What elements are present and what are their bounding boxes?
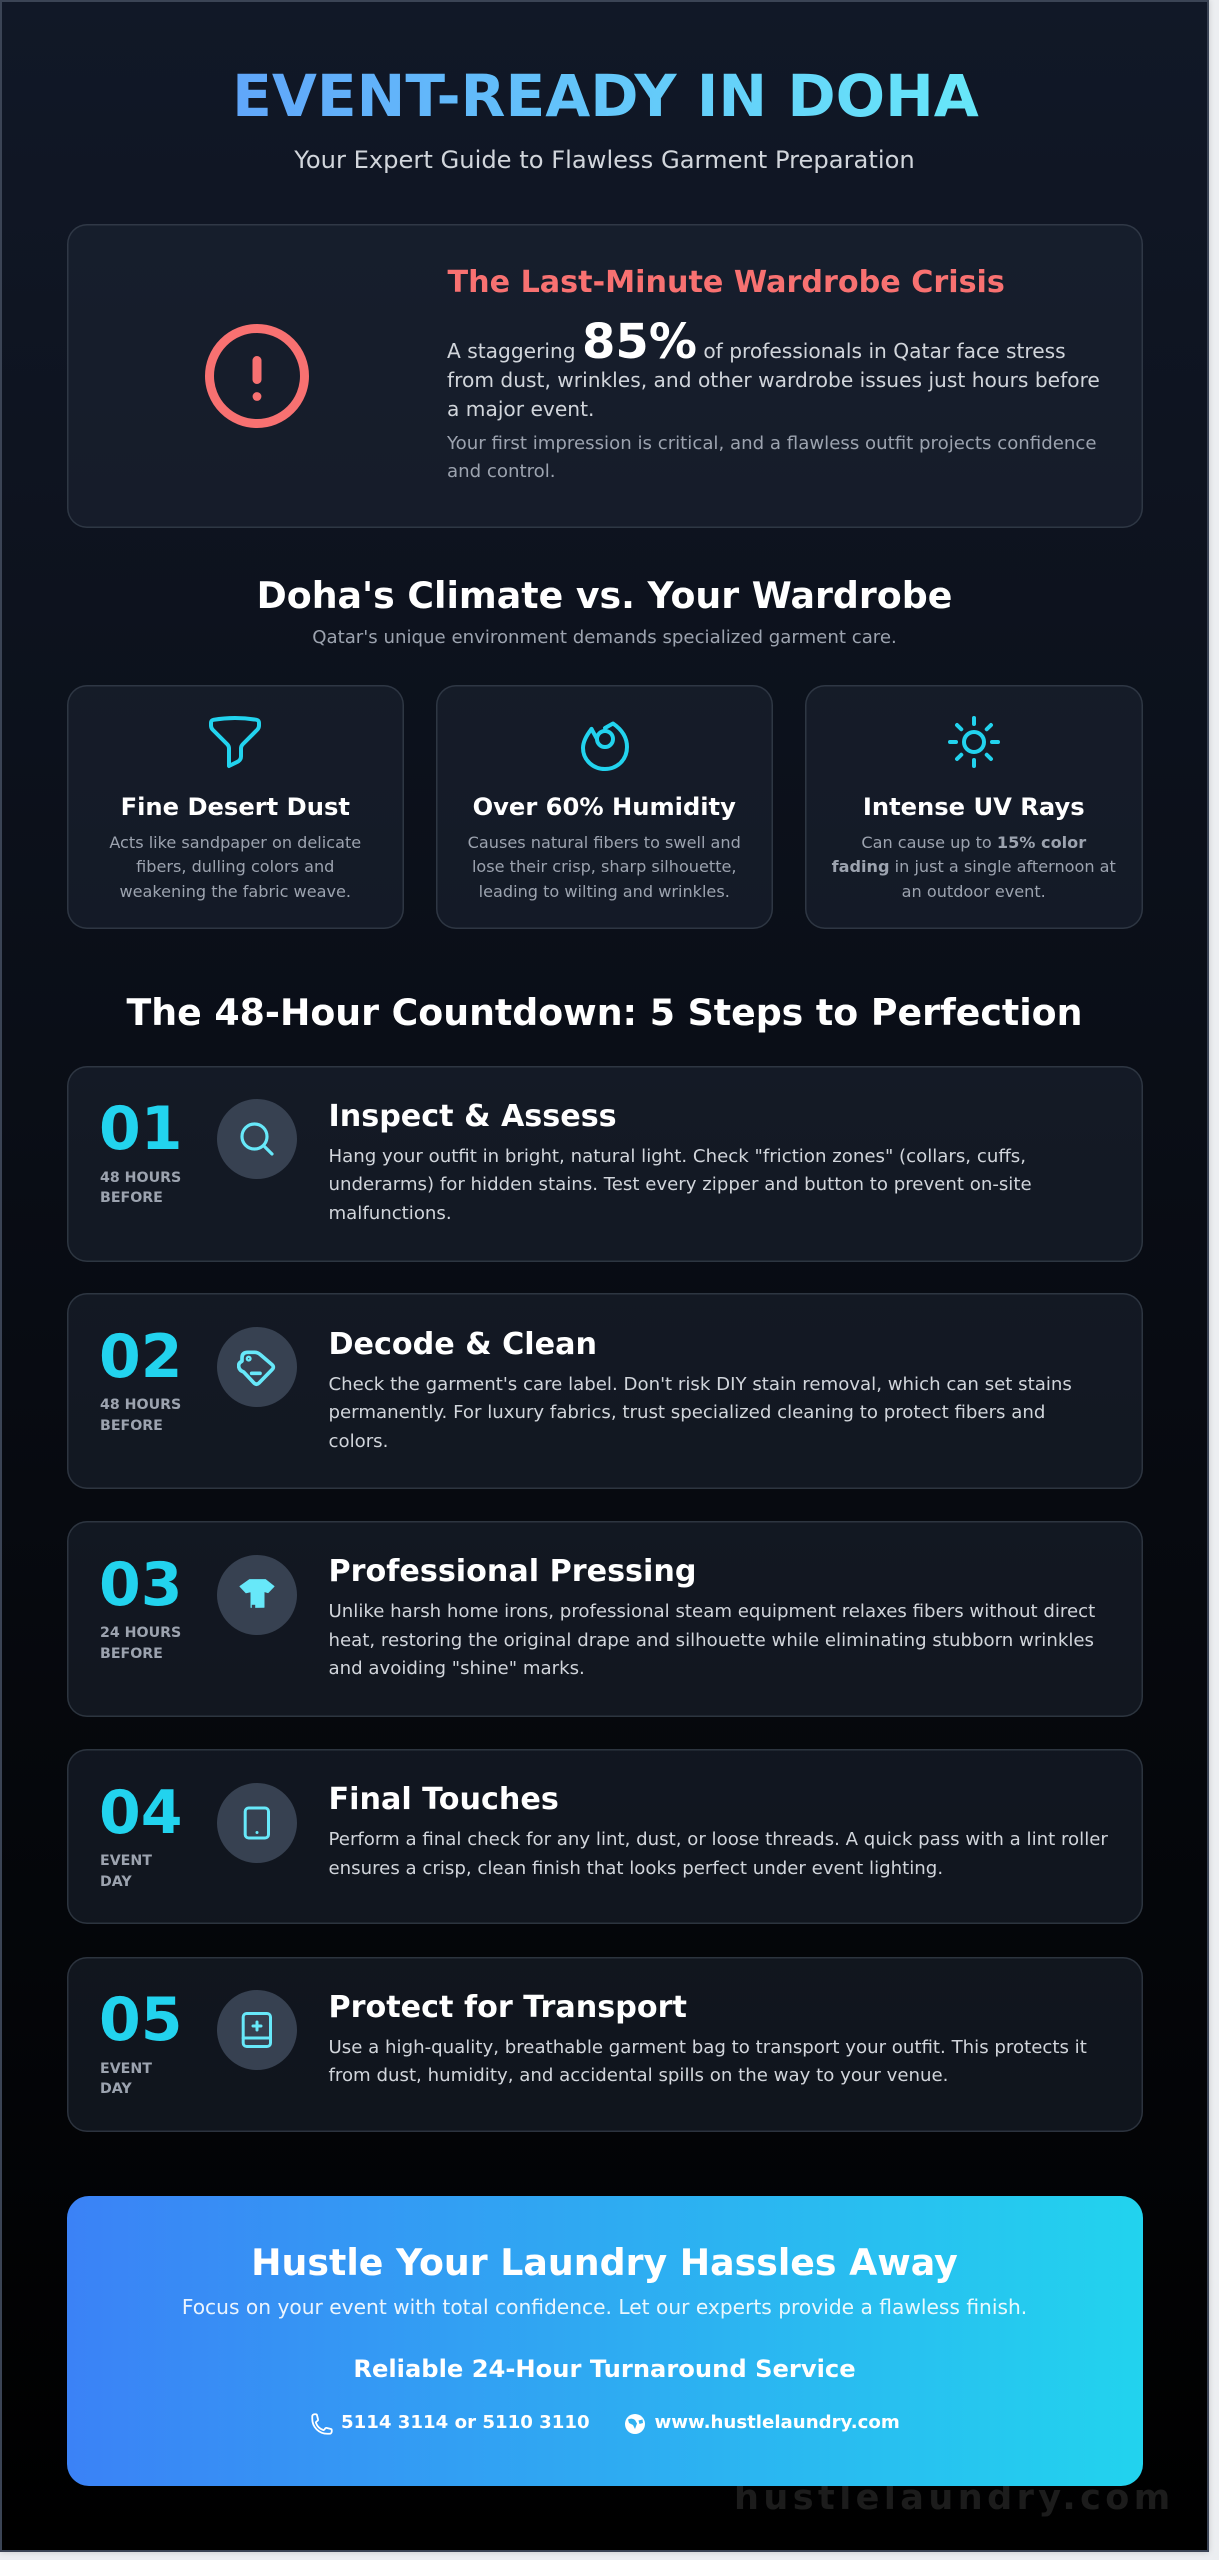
step title: Inspect & Assess — [328, 1099, 617, 1134]
card text — [468, 833, 741, 901]
step timing — [100, 1397, 181, 1434]
icon: alert circle — [205, 324, 309, 428]
panel: fine desert dust — [66, 685, 404, 928]
icon: funnel — [209, 716, 261, 768]
card text — [832, 833, 1116, 901]
step timing — [100, 2060, 152, 2097]
card text: Can cause up to 15% color — [861, 833, 1086, 852]
step text: from dust, humidity, and accidental spills on the way to your venue. — [328, 2065, 948, 2086]
climate subheading: Qatar's unique environment demands specialized garment care. — [312, 627, 897, 648]
step text: Check the garment's care label. Don't risk DIY stain removal, which can set stains — [328, 1374, 1072, 1395]
card text: Causes natural fibers to swell and — [468, 833, 741, 852]
crisis supporting text: Your first impression is critical, and a flawless outfit projects confidence — [447, 433, 1097, 454]
step timing: BEFORE — [100, 1190, 163, 1206]
card text — [109, 833, 361, 901]
icon: sun — [948, 716, 1000, 768]
panel: step 4 — [66, 1749, 1142, 1924]
crisis supporting text — [447, 433, 1097, 482]
card text: an outdoor event. — [902, 882, 1046, 901]
step title: Professional Pressing — [328, 1554, 696, 1589]
step text: and avoiding "shine" marks. — [328, 1658, 585, 1679]
panel: step 5 — [66, 1956, 1142, 2132]
step timing: 48 HOURS — [100, 1170, 181, 1186]
panel: humidity — [436, 685, 772, 928]
step text — [328, 1829, 1108, 1879]
panel: wardrobe crisis — [66, 224, 1142, 528]
step text — [328, 1146, 1032, 1224]
step number: 05 — [99, 1985, 182, 2055]
icon: tablet — [217, 1782, 297, 1862]
step title: Decode & Clean — [328, 1327, 597, 1362]
icon: humidity swirl — [581, 722, 629, 771]
panel: uv rays — [805, 685, 1142, 928]
icon: garment bag — [217, 1990, 297, 2070]
crisis statistic text: A staggering 85% of professionals in Qatar face stress — [447, 314, 1066, 370]
step text: Unlike harsh home irons, professional steam equipment relaxes fibers without direct — [328, 1601, 1095, 1622]
step text: Hang your outfit in bright, natural light. Check "friction zones" (collars, cuffs, — [328, 1146, 1026, 1167]
phone numbers: 5114 3114 or 5110 3110 — [341, 2412, 590, 2433]
crisis supporting text: and control. — [447, 461, 556, 482]
watermark: hustlelaundry.com — [734, 2478, 1175, 2518]
step text: underarms) for hidden stains. Test every zipper and button to prevent on-site — [328, 1174, 1032, 1195]
step text: permanently. For luxury fabrics, trust specialized cleaning to protect fibers and — [328, 1402, 1045, 1423]
countdown heading: The 48-Hour Countdown: 5 Steps to Perfection — [127, 991, 1082, 1034]
step text — [328, 2037, 1087, 2086]
panel: call to action — [66, 2196, 1142, 2486]
cta heading: Hustle Your Laundry Hassles Away — [251, 2241, 958, 2284]
step number: 03 — [99, 1550, 182, 1620]
step timing: DAY — [100, 2081, 132, 2097]
icon: tag — [217, 1327, 297, 1407]
panel: step 2 — [66, 1293, 1142, 1489]
step text: heat, restoring the original drape and silhouette while eliminating stubborn wrinkles — [328, 1630, 1094, 1651]
step timing: EVENT — [100, 1853, 152, 1869]
step timing: BEFORE — [100, 1646, 163, 1662]
step timing: 48 HOURS — [100, 1397, 181, 1413]
step timing — [100, 1170, 181, 1206]
cta service line: Reliable 24-Hour Turnaround Service — [353, 2355, 856, 2383]
step number: 01 — [99, 1094, 182, 1164]
card title: Over 60% Humidity — [473, 792, 736, 820]
step text — [328, 1374, 1072, 1452]
step text: Perform a final check for any lint, dust, or loose threads. A quick pass with a lint roller — [328, 1829, 1108, 1850]
icon: phone — [311, 2413, 333, 2435]
icon: globe — [625, 2414, 645, 2434]
panel: step 3 — [66, 1521, 1142, 1717]
card text: leading to wilting and wrinkles. — [479, 882, 730, 901]
card text: lose their crisp, sharp silhouette, — [472, 857, 737, 876]
icon: magnifier — [217, 1099, 297, 1179]
card text: fibers, dulling colors and — [136, 857, 334, 876]
step timing — [100, 1853, 152, 1890]
step text — [328, 1601, 1095, 1679]
cta text: Focus on your event with total confidence. Let our experts provide a flawless finish. — [182, 2295, 1027, 2319]
card title: Intense UV Rays — [863, 792, 1085, 820]
step timing: DAY — [100, 1874, 132, 1890]
card text: fading in just a single afternoon at — [832, 857, 1116, 876]
step timing: 24 HOURS — [100, 1625, 181, 1641]
step text: ensures a crisp, clean finish that looks perfect under event lighting. — [328, 1858, 943, 1879]
card text: Acts like sandpaper on delicate — [109, 833, 361, 852]
crisis statistic text — [447, 314, 1100, 421]
crisis statistic text: from dust, wrinkles, and other wardrobe issues just hours before — [447, 368, 1100, 392]
step text: Use a high-quality, breathable garment bag to transport your outfit. This protects it — [328, 2037, 1087, 2058]
icon: shirt — [217, 1555, 297, 1635]
step number: 02 — [99, 1322, 182, 1392]
step title: Protect for Transport — [328, 1990, 687, 2025]
title: EVENT-READY IN DOHA — [232, 62, 979, 130]
step text: colors. — [328, 1430, 388, 1452]
crisis statistic text: a major event. — [447, 397, 594, 421]
subtitle: Your Expert Guide to Flawless Garment Preparation — [294, 146, 915, 174]
card title: Fine Desert Dust — [121, 792, 350, 820]
card text: weakening the fabric weave. — [119, 882, 351, 901]
step title: Final Touches — [328, 1782, 559, 1817]
step timing: EVENT — [100, 2060, 152, 2076]
step timing: BEFORE — [100, 1418, 163, 1434]
step timing — [100, 1625, 181, 1662]
step text: malfunctions. — [328, 1203, 452, 1224]
panel: step 1 — [66, 1066, 1142, 1262]
website: www.hustlelaundry.com — [654, 2412, 900, 2433]
step number: 04 — [99, 1778, 182, 1848]
climate heading: Doha's Climate vs. Your Wardrobe — [257, 574, 952, 617]
crisis heading: The Last-Minute Wardrobe Crisis — [448, 265, 1005, 300]
